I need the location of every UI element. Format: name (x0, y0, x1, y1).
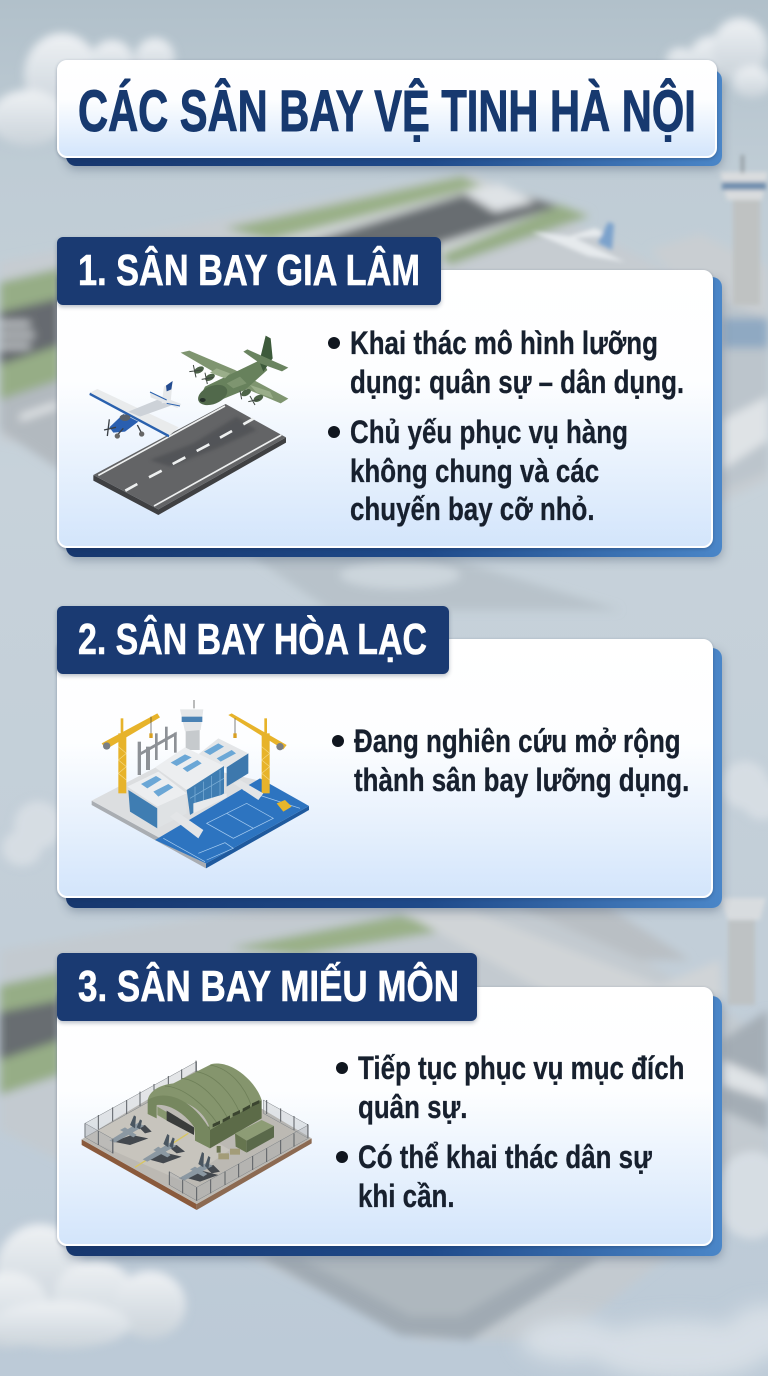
bullet: expansion under study (332, 723, 689, 798)
panel: Sân bay Gia Lâm (54, 236, 728, 1194)
front fence (85, 1123, 308, 1201)
bullet: mixed-use operation: dụng: quân sự – dân dụng. (350, 364, 684, 400)
plane (532, 228, 625, 262)
rear fence (85, 1062, 308, 1138)
panel: Sân bay Hòa Lạc (54, 606, 728, 916)
bullet: military use (336, 1050, 684, 1125)
bullet: mixed-use operation (328, 325, 684, 400)
lower tower (728, 915, 755, 1005)
jets (109, 1123, 213, 1181)
lower airport (0, 905, 768, 1340)
tower (186, 727, 200, 750)
bullet: military use: quân sự. (358, 1089, 468, 1125)
bullet: military use: Tiếp tục phục vụ mục đích (358, 1050, 684, 1086)
clouds bottom-left (0, 1224, 186, 1349)
terminal (227, 753, 248, 787)
section heading 1 (57, 237, 441, 305)
section heading 2: 2. SÂN BAY HÒA LẠC (78, 615, 427, 664)
bullet: general aviation: chuyến bay cỡ nhỏ. (350, 491, 595, 527)
clouds top-right (666, 18, 768, 98)
bullet: general aviation (328, 414, 628, 527)
title text: CÁC SÂN BAY VỆ TINH HÀ NỘI (78, 79, 696, 144)
section heading 1: 1. SÂN BAY GIA LÂM (78, 246, 420, 295)
bullet: expansion under study: thành sân bay lưỡng dụng. (354, 762, 689, 798)
small blue plane (89, 381, 181, 439)
section heading 2 (57, 606, 449, 674)
bullet: expansion under study: Đang nghiên cứu mở rộng (354, 723, 681, 759)
clouds bottom-right (520, 1304, 768, 1376)
bullet: civil use when needed (336, 1139, 652, 1214)
cranes (102, 713, 287, 793)
panel: Sân bay Miếu Môn (54, 952, 728, 1264)
icon: runway with civil and military planes (89, 336, 288, 515)
clouds middle (2, 761, 768, 1239)
upper airport slab (0, 172, 768, 560)
bullet: general aviation: Chủ yếu phục vụ hàng (350, 414, 628, 450)
hangar (195, 1100, 262, 1148)
vehicle (277, 800, 292, 812)
green cargo plane (181, 336, 288, 409)
bullet: civil use when needed: khi cần. (358, 1178, 455, 1214)
crates (217, 1146, 240, 1159)
bullet: general aviation: không chung và các (350, 453, 599, 489)
upper tower (733, 195, 760, 305)
bullet: civil use when needed: Có thể khai thác dân sự (358, 1139, 652, 1175)
section heading 3: 3. SÂN BAY MIẾU MÔN (78, 962, 459, 1011)
jet shadows (113, 1125, 220, 1182)
annex (235, 1120, 274, 1141)
mid blur (250, 555, 620, 610)
icon: military hangar with fighter jets behind fence (82, 1060, 312, 1210)
bullet: mixed-use operation: Khai thác mô hình lưỡng (350, 325, 658, 361)
terminal & building (650, 234, 768, 340)
icon: terminal under construction with cranes and blueprint (92, 700, 309, 868)
frame (138, 727, 177, 775)
section heading 3 (57, 953, 477, 1021)
clouds top-left (0, 33, 175, 146)
title banner (55, 59, 727, 174)
